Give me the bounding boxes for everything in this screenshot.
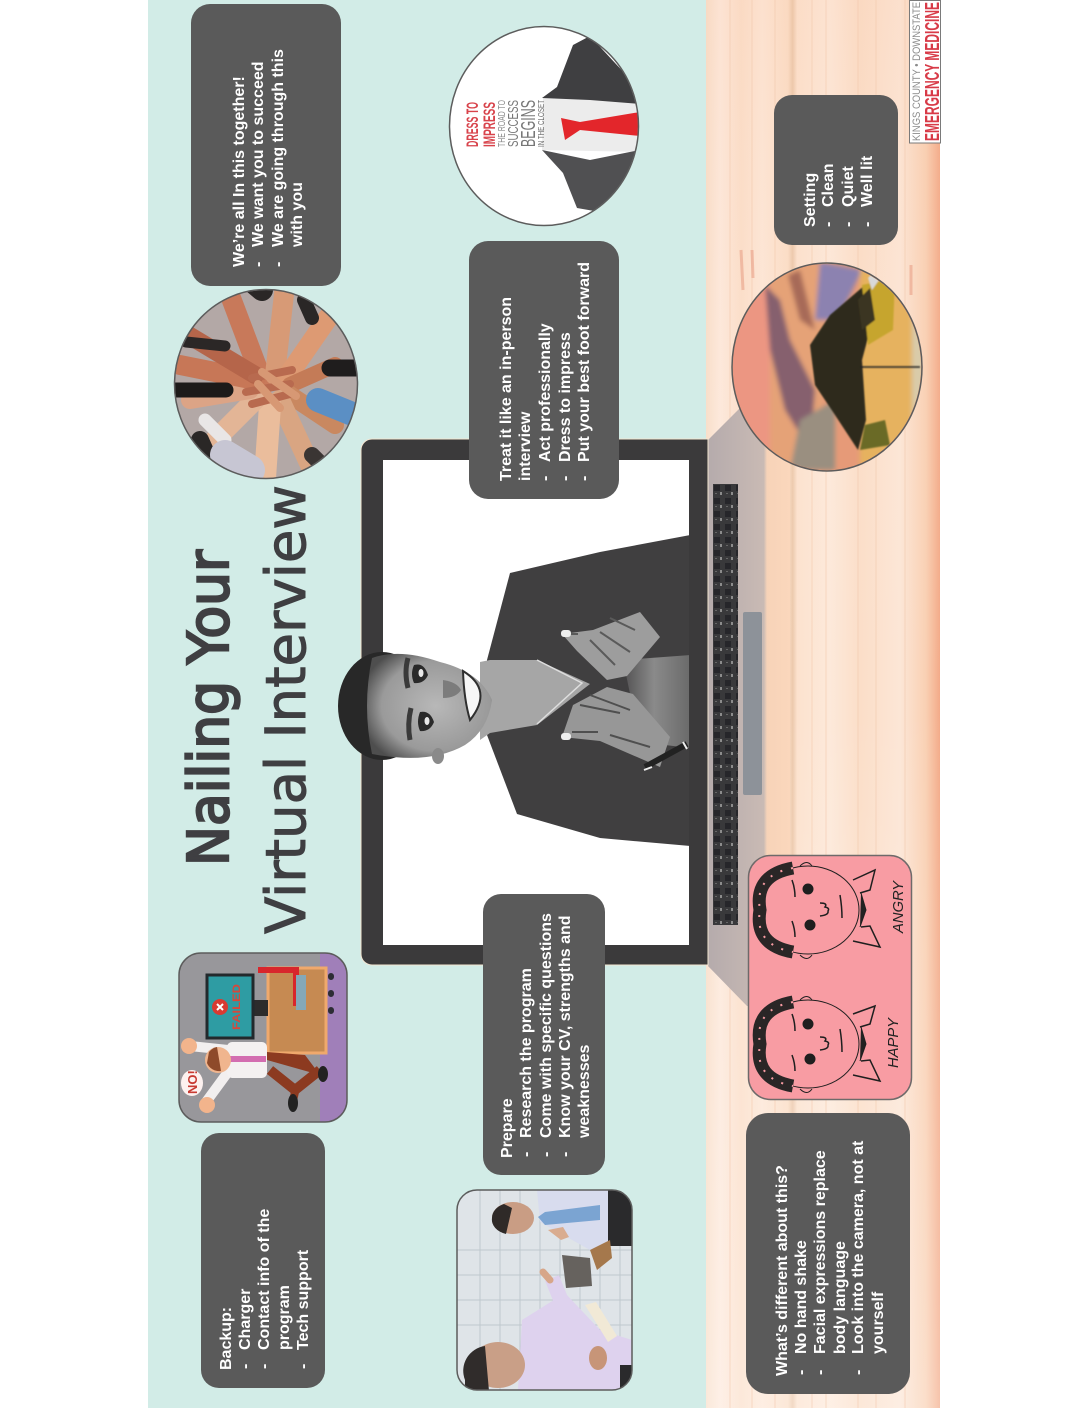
panel: backup: - (237, 1364, 254, 1369)
panel: mint background (148, 0, 706, 1408)
panel: what's different about this: - (850, 1370, 867, 1375)
panel: treat it like an in-person interview: - (557, 476, 574, 481)
panel: we're all in this together: with you (289, 182, 306, 248)
panel: what's different about this: What’s different about this? (774, 1165, 791, 1376)
panel: setting: - (820, 222, 837, 227)
chair (258, 970, 296, 1006)
panel: what's different about this (746, 1113, 910, 1394)
laptop on table (562, 1255, 592, 1288)
image: dress to impress: THE ROAD TO (497, 100, 508, 147)
panel: we're all in this together: We are going through this (270, 49, 287, 247)
image: dress to impress: IN THE CLOSET (537, 100, 546, 147)
monitor screen (383, 460, 689, 945)
panel: we're all in this together: - (250, 262, 267, 267)
suit jacket (487, 535, 690, 846)
image: dress to impress: SUCCESS (505, 100, 522, 147)
laptop base (708, 408, 790, 1010)
panel: setting (774, 95, 898, 245)
person top (492, 1190, 632, 1250)
panel: prepare: - (538, 1152, 555, 1157)
happy face (757, 996, 880, 1092)
monitor frame (361, 439, 708, 965)
panel: what's different about this: - (793, 1370, 810, 1375)
monitor (207, 975, 253, 1038)
panel: treat it like an in-person interview: - (537, 476, 554, 481)
title: Nailing Your (177, 549, 242, 866)
head (338, 652, 492, 764)
panel: prepare: weaknesses (576, 1044, 593, 1139)
panel: setting: Quiet (840, 165, 857, 207)
image: failed computer cartoon (179, 953, 347, 1122)
panel: backup: Contact info of the (256, 1209, 273, 1350)
jacket lower (542, 150, 640, 212)
panel: backup: Backup: (218, 1307, 235, 1370)
panel: setting: Setting (802, 173, 819, 227)
panel: backup: Tech support (295, 1249, 312, 1350)
image: failed computer cartoon: FAILED (231, 984, 243, 1030)
red tie (561, 112, 640, 140)
desk feet (328, 976, 334, 1011)
shirt (623, 655, 690, 748)
monitor stand (253, 1000, 268, 1016)
panel: backup: - (256, 1364, 273, 1369)
label: happy: HAPPY (885, 1017, 902, 1068)
panel: what's different about this: body language (832, 1241, 849, 1354)
upper hand (561, 612, 660, 680)
panel: what's different about this: Look into the camera, not at (850, 1140, 867, 1354)
panel: we're all in this together: - (270, 262, 287, 267)
person on screen (338, 535, 690, 846)
panel: what's different about this: Facial expressions replace (812, 1150, 829, 1354)
image: landscape (730, 260, 927, 475)
image: dress to impress: BEGINS (518, 100, 540, 147)
panel: treat it like an in-person interview: interview (517, 411, 534, 481)
title (177, 485, 318, 934)
laptop (361, 408, 790, 1010)
panel: what's different about this: - (812, 1370, 829, 1375)
speech bubble NO! (181, 1070, 203, 1096)
person bottom (463, 1272, 632, 1391)
angry face (757, 862, 880, 958)
panel: backup: program (276, 1285, 293, 1350)
keyboard (713, 484, 738, 925)
trackpad (743, 612, 762, 795)
panel: prepare: Come with specific questions (538, 913, 555, 1138)
panel: treat it like an in-person interview: Act professionally (537, 323, 554, 462)
panel: we're all in this together: We want you to succeed (250, 61, 267, 247)
panel: treat it like an in-person interview: - (576, 476, 593, 481)
panel: prepare: - (518, 1152, 535, 1157)
label: angry: ANGRY (890, 880, 907, 934)
panel: we're all in this together (191, 4, 341, 286)
speech bubble NO!: NO! (185, 1070, 200, 1094)
panel: setting: - (859, 222, 876, 227)
panel: what's different about this: No hand shake (793, 1240, 810, 1354)
panel: setting: Well lit (859, 155, 876, 207)
panel: treat it like an in-person interview: Treat it like an in-person (498, 297, 515, 481)
image: stacked hands (170, 280, 360, 479)
panel: prepare: - (557, 1152, 574, 1157)
floor (320, 953, 347, 1122)
image: dress to impress: DRESS TO (463, 102, 482, 147)
panel: backup: - (295, 1364, 312, 1369)
panel: treat it like an in-person interview (469, 241, 619, 499)
panel: prepare: Prepare (499, 1098, 516, 1158)
panel: backup: Charger (237, 1289, 254, 1350)
title: Virtual Interview (254, 485, 318, 934)
panel: treat it like an in-person interview: Put your best foot forward (576, 262, 593, 462)
panel: prepare (483, 894, 605, 1175)
panel: prepare: Research the program (518, 968, 535, 1138)
image: dress to impress (450, 26, 640, 226)
watch (645, 744, 687, 767)
panel: prepare: Know your CV, strengths and (557, 915, 574, 1138)
panel: facial expressions (748, 856, 912, 1100)
panel: treat it like an in-person interview: Dress to impress (557, 332, 574, 462)
desk (268, 968, 326, 1053)
panel: wooden desk (706, 0, 940, 1408)
panel: setting: - (840, 222, 857, 227)
image: two colleagues in office (457, 1190, 632, 1391)
image: dress to impress: IMPRESS (480, 102, 499, 147)
shirt (542, 98, 640, 152)
panel: backup (201, 1133, 325, 1388)
worried man (181, 1038, 328, 1113)
panel: what's different about this: yourself (870, 1291, 887, 1354)
neck and chest (480, 660, 590, 740)
lower hand (561, 687, 670, 767)
panel: we're all in this together: We’re all In this together! (231, 76, 248, 267)
jacket upper (542, 36, 640, 104)
panel: setting: Clean (820, 163, 837, 207)
logo: Kings County Downstate Emergency Medicine (910, 0, 944, 143)
